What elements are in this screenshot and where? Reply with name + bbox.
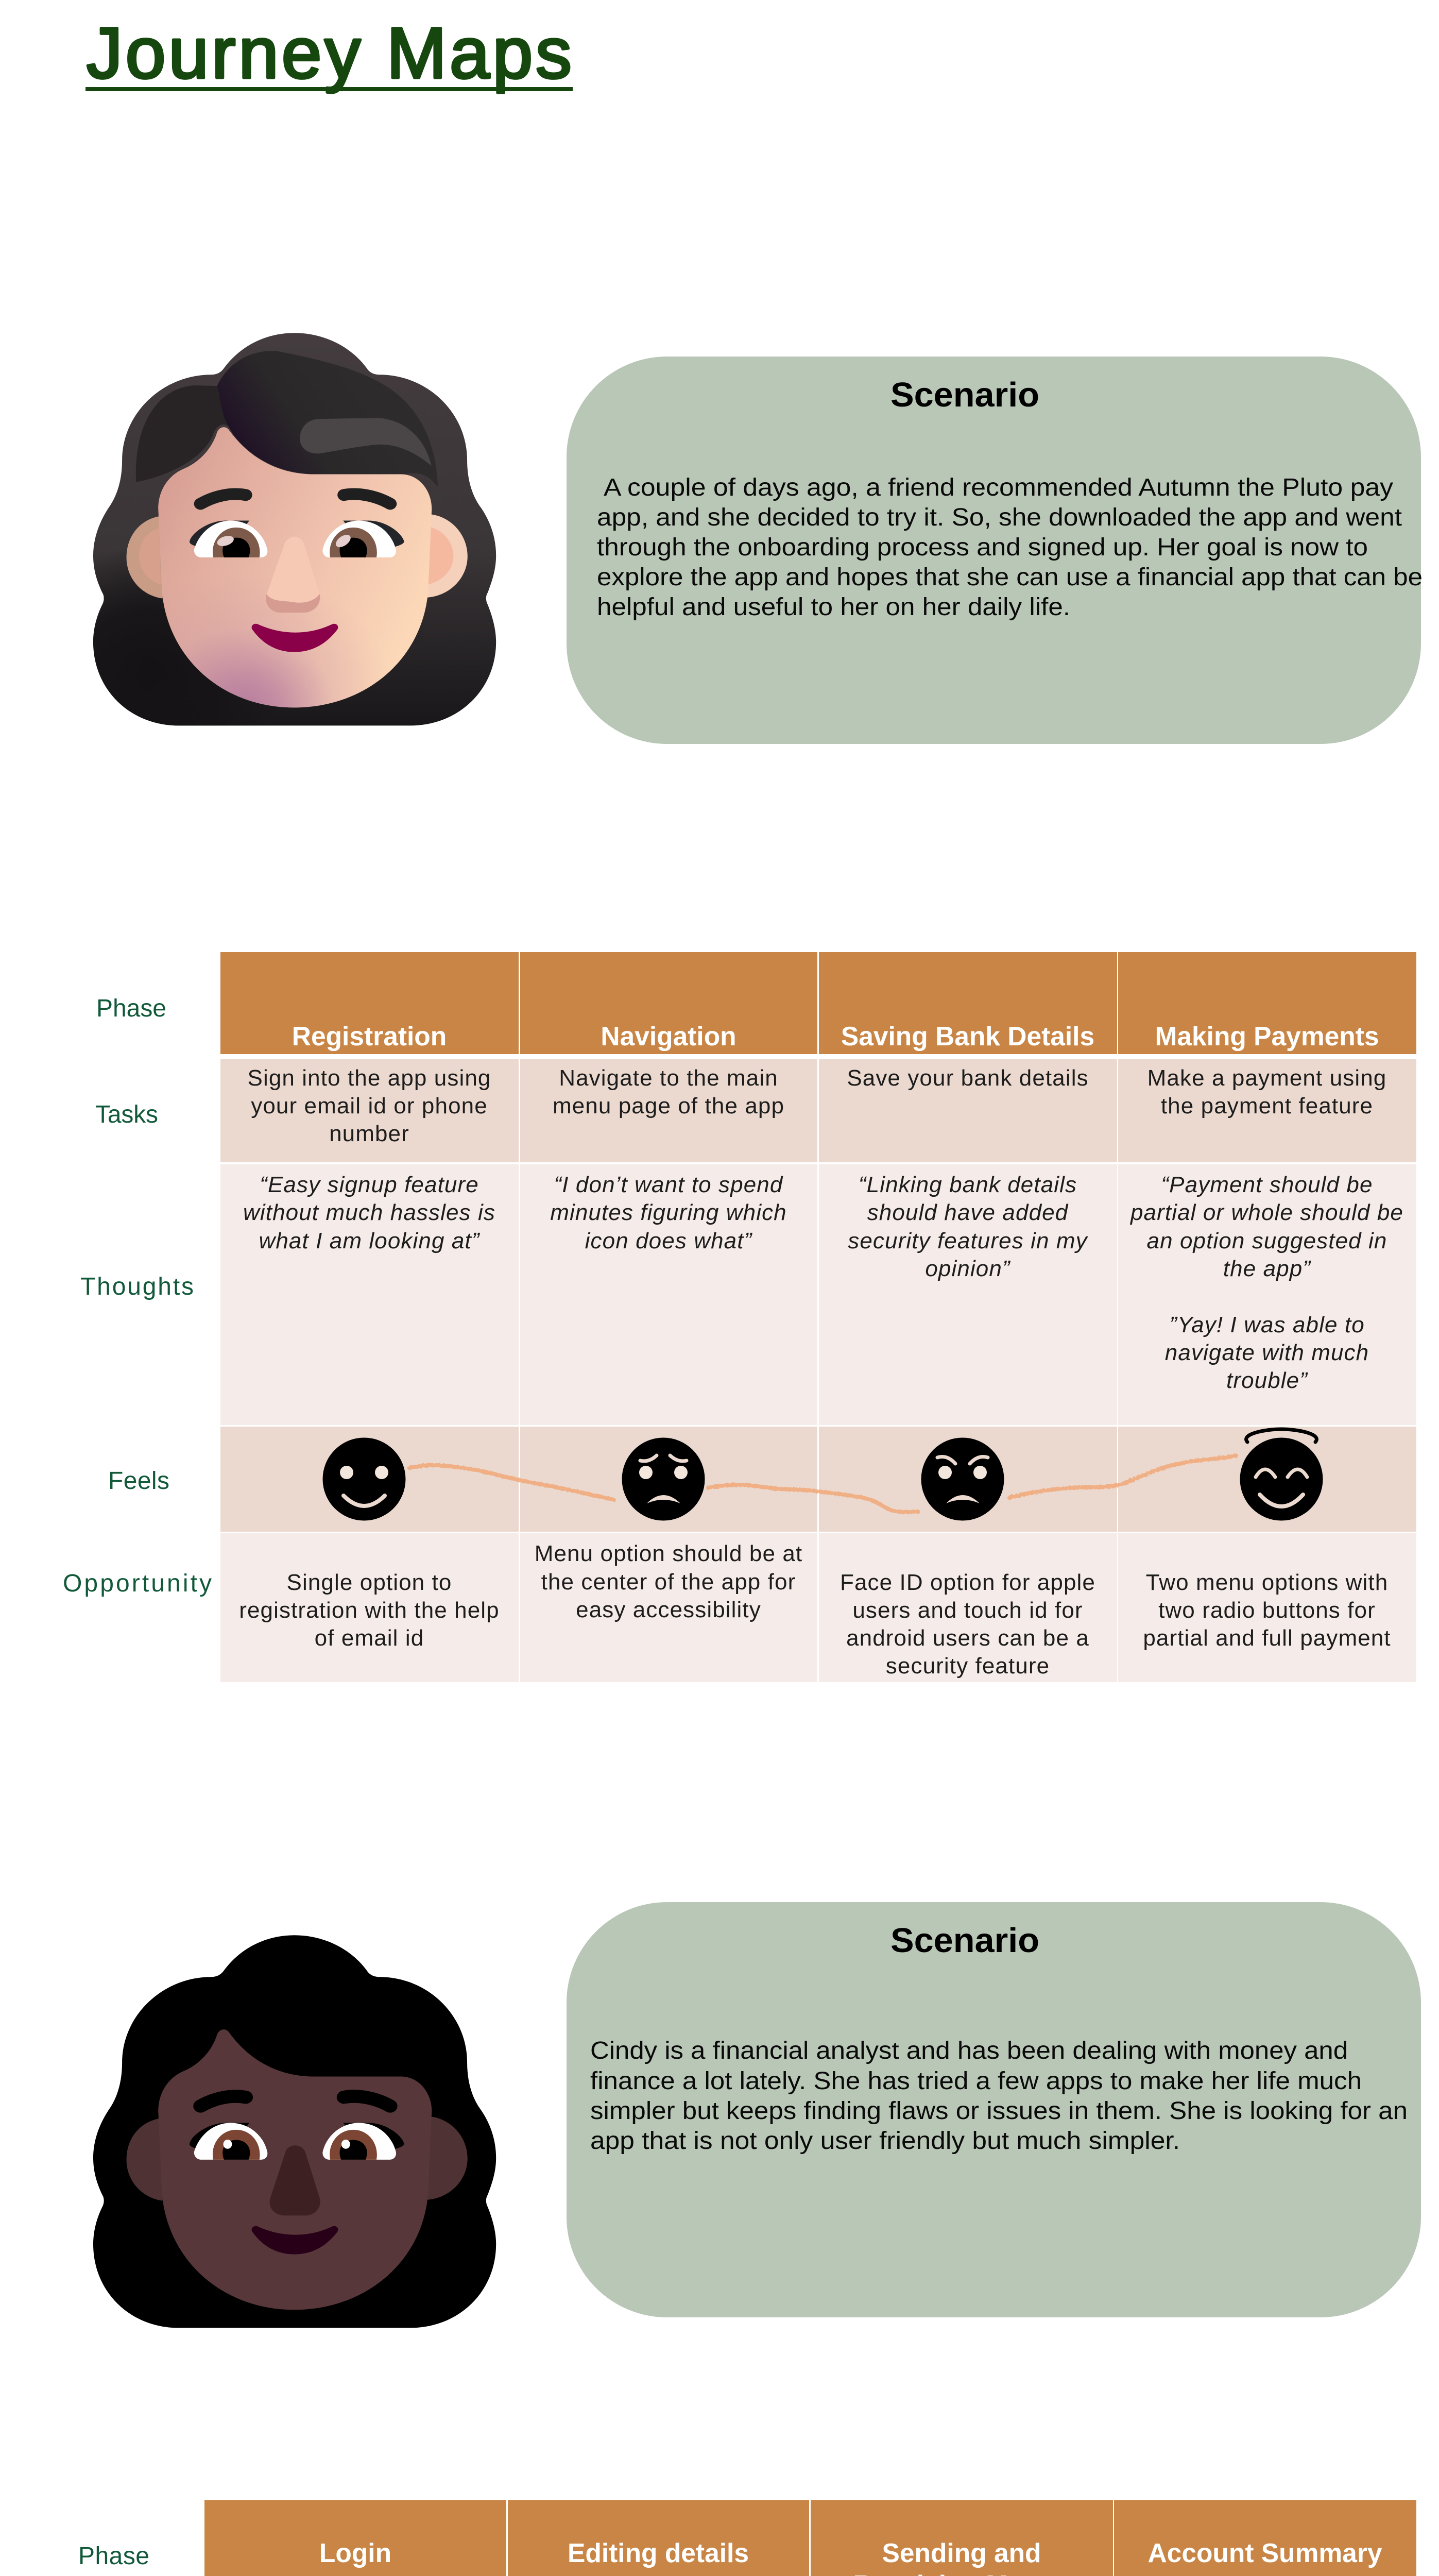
phase row: Login xyxy=(319,2538,391,2568)
thoughts row: “Linking bank details xyxy=(859,1172,1077,1197)
opportunity row: Menu option should be at xyxy=(535,1541,802,1566)
heading: scenario 2: Scenario xyxy=(890,1921,1039,1960)
icon: happy face xyxy=(322,1437,406,1521)
phase row: Saving Bank Details xyxy=(841,1021,1094,1051)
opportunity row: two radio buttons for xyxy=(1158,1598,1376,1623)
thoughts row: without much hassles is xyxy=(243,1200,495,1225)
thoughts row: ”Yay! I was able to xyxy=(1169,1312,1365,1337)
mouth xyxy=(252,2226,338,2255)
opportunity row: security feature xyxy=(886,1653,1050,1679)
eyes xyxy=(190,2123,404,2157)
face xyxy=(158,427,432,707)
row labels: Phase xyxy=(78,2543,149,2570)
thoughts row: an option suggested in xyxy=(1146,1228,1387,1253)
opportunity row: Two menu options with xyxy=(1146,1570,1388,1595)
row labels xyxy=(63,995,212,1597)
tasks row: your email id or phone xyxy=(251,1093,488,1118)
heading: scenario 1: Scenario xyxy=(890,376,1039,414)
tasks row: the payment feature xyxy=(1161,1093,1373,1118)
text: scenario 1 body: through the onboarding process and signed up. Her goal is now to xyxy=(597,534,1368,561)
row labels: Opportunity xyxy=(63,1570,212,1597)
phase row: Making Payments xyxy=(1155,1021,1379,1051)
ears xyxy=(127,516,163,599)
opportunity row: android users can be a xyxy=(846,1625,1089,1651)
thoughts row: minutes figuring which xyxy=(550,1200,787,1225)
row labels: Tasks xyxy=(95,1101,158,1128)
thoughts row: partial or whole should be xyxy=(1129,1200,1403,1225)
tasks row: number xyxy=(329,1121,409,1146)
thoughts row: “Payment should be xyxy=(1161,1172,1373,1197)
opportunity row: the center of the app for xyxy=(541,1569,796,1595)
tasks row: Save your bank details xyxy=(847,1065,1089,1091)
thoughts row: icon does what” xyxy=(585,1228,753,1253)
text: scenario 2 body: finance a lot lately. She has tried a few apps to make her life much xyxy=(590,2067,1362,2095)
front lock xyxy=(217,351,438,487)
phase row xyxy=(220,952,1416,1054)
hair xyxy=(93,333,496,725)
tasks row: Navigate to the main xyxy=(559,1065,778,1091)
ears xyxy=(127,2116,468,2201)
text: scenario 2 body: Cindy is a financial analyst and has been dealing with money and xyxy=(590,2037,1348,2064)
tasks row: Sign into the app using xyxy=(248,1065,491,1091)
phase row: Navigation xyxy=(601,1021,736,1051)
text: scenario 2 body: simpler but keeps finding flaws or issues in them. She is looking for an xyxy=(590,2097,1408,2125)
thoughts row: should have added xyxy=(867,1200,1069,1225)
tasks row: Make a payment using xyxy=(1147,1065,1386,1091)
journey line: angry to angel xyxy=(1009,1455,1236,1498)
phase row: Sending and xyxy=(882,2538,1041,2568)
mouth xyxy=(252,624,338,652)
phase row: Editing details xyxy=(568,2538,749,2568)
text: scenario 2 body xyxy=(590,2037,1408,2155)
phase row xyxy=(204,2500,1416,2576)
eyebrows xyxy=(200,2096,390,2106)
feels row xyxy=(220,1427,1416,1532)
thoughts row: “Easy signup feature xyxy=(260,1172,479,1197)
opportunity row: registration with the help xyxy=(239,1598,500,1623)
nose xyxy=(266,537,320,613)
opportunity row: Single option to xyxy=(287,1570,452,1595)
row labels: Thoughts xyxy=(80,1273,194,1300)
panel: journey map 2 xyxy=(45,2500,1416,2576)
hair shadow xyxy=(93,333,496,725)
thoughts row: trouble” xyxy=(1226,1368,1308,1393)
hair highlight xyxy=(300,418,432,466)
text: scenario 2 body: app that is not only user friendly but much simpler. xyxy=(590,2127,1180,2155)
left lock xyxy=(136,385,230,482)
hair xyxy=(93,1935,496,2328)
panel: journey map 1 xyxy=(63,952,1416,1682)
avatar: dark-skinned woman xyxy=(93,1935,496,2328)
eyebrows xyxy=(200,494,390,504)
avatar details: hair locks and nose xyxy=(136,351,438,613)
opportunity row: partial and full payment xyxy=(1143,1625,1391,1651)
journey line: happy to worried xyxy=(409,1465,614,1500)
phase row: Registration xyxy=(292,1021,447,1051)
thoughts row: security features in my xyxy=(848,1228,1089,1253)
tasks row: menu page of the app xyxy=(553,1093,784,1118)
text: scenario 1 body: helpful and useful to her on her daily life. xyxy=(597,594,1070,621)
icon: worried face xyxy=(622,1437,705,1521)
row labels: Feels xyxy=(108,1467,169,1495)
title: Journey Maps xyxy=(87,12,572,93)
opportunity row: of email id xyxy=(315,1625,424,1651)
phase row: Account Summary xyxy=(1147,2538,1382,2568)
text: scenario 1 body: app, and she decided to try it. So, she downloaded the app and went xyxy=(597,504,1402,531)
tasks row xyxy=(220,1059,1416,1162)
icon: angry face xyxy=(921,1437,1004,1521)
journey line: worried to angry xyxy=(708,1485,918,1512)
thoughts row: navigate with much xyxy=(1165,1340,1369,1365)
text: scenario 1 body: explore the app and hopes that she can use a financial app that can be xyxy=(597,564,1423,591)
face xyxy=(158,2029,432,2310)
opportunity row xyxy=(220,1533,1416,1682)
thoughts row: “I don’t want to spend xyxy=(554,1172,783,1197)
panel: scenario 1 xyxy=(567,357,1423,744)
thoughts row: what I am looking at” xyxy=(259,1228,481,1253)
text: scenario 1 body: A couple of days ago, a friend recommended Autumn the Pluto pay xyxy=(604,474,1393,501)
avatar: light-skinned woman xyxy=(93,333,496,725)
nose shadow xyxy=(266,594,320,613)
nose xyxy=(270,2145,320,2215)
opportunity row: users and touch id for xyxy=(852,1598,1083,1623)
text: scenario 1 body xyxy=(597,474,1423,621)
thoughts row: opinion” xyxy=(925,1256,1011,1281)
opportunity row: easy accessibility xyxy=(576,1597,761,1622)
row labels: Phase xyxy=(96,995,166,1022)
thoughts row xyxy=(220,1164,1416,1425)
panel: scenario 2 xyxy=(567,1902,1421,2317)
thoughts row: the app” xyxy=(1223,1256,1311,1281)
icon: angel face xyxy=(1240,1429,1323,1521)
opportunity row: Face ID option for apple xyxy=(840,1570,1095,1595)
eyes xyxy=(190,520,404,555)
